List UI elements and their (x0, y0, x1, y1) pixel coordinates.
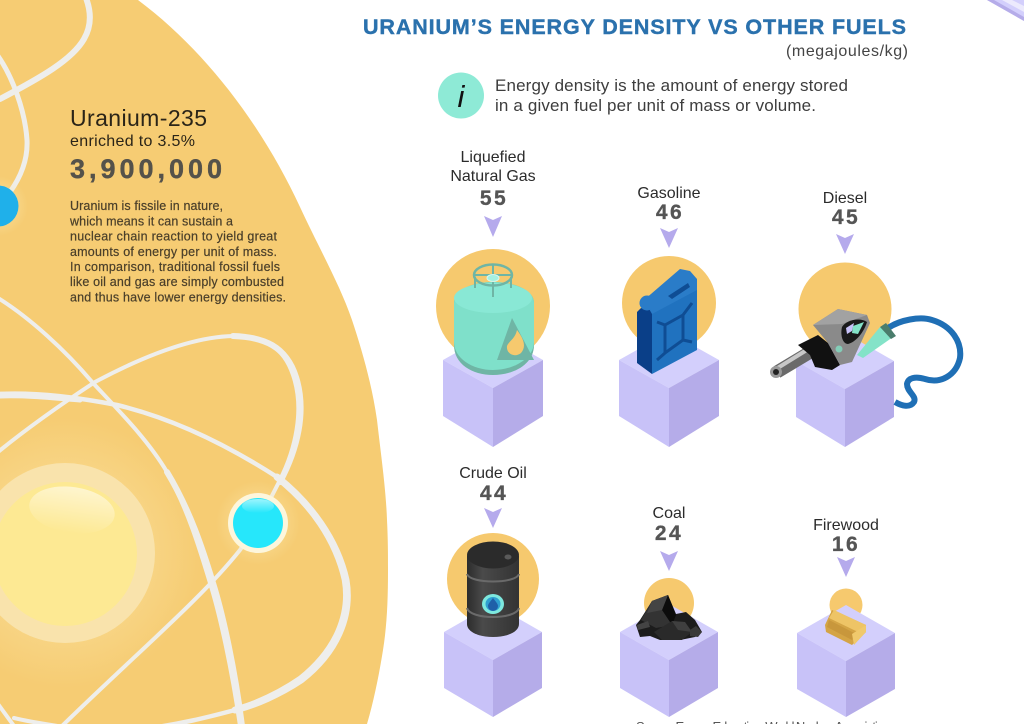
fuel: diesel (770, 190, 960, 447)
callout: energy density definition: Energy density is the amount of energy stored (495, 76, 848, 95)
panel: uranium atom background (0, 0, 388, 724)
fuel: gasoline: Gasoline (637, 185, 701, 202)
icon: gas cylinder (454, 264, 534, 375)
text block: uranium-235 (69, 105, 286, 304)
fuel: coal: 24 (655, 522, 683, 545)
text block: uranium-235: Uranium is fissile in nature, (70, 199, 223, 213)
text block: uranium-235: and thus have lower energy densities. (70, 290, 286, 304)
icon: jerry can (637, 269, 697, 374)
text block: uranium-235: like oil and gas are simply combusted (70, 275, 284, 289)
fuel: crude oil (444, 465, 542, 717)
fuel: crude oil: Crude Oil (459, 465, 527, 482)
text block: uranium-235: nuclear chain reaction to yield great (70, 230, 278, 244)
text block: uranium-235: amounts of energy per unit of mass. (70, 245, 277, 259)
icon: info: i (458, 79, 466, 114)
fuel: coal (620, 505, 718, 717)
text block: uranium-235: enriched to 3.5% (70, 133, 195, 150)
fuel: gasoline (619, 185, 719, 447)
callout: energy density definition (438, 72, 848, 118)
text block: uranium-235: Uranium-235 (70, 105, 207, 131)
icon: oil barrel (467, 542, 519, 637)
icon: firewood bundle (825, 610, 866, 645)
icon: coal pile (636, 595, 702, 640)
fuel: liquefied natural gas: Liquefied (461, 149, 525, 166)
fuel: gasoline: 46 (656, 201, 684, 224)
title: URANIUM’S ENERGY DENSITY VS OTHER FUELS (363, 15, 906, 39)
fuel: coal: Coal (653, 505, 685, 522)
fuel: liquefied natural gas: 55 (480, 187, 508, 210)
icon: nucleus (0, 418, 200, 688)
unit label: (megajoules/kg) (786, 43, 908, 60)
icon: electron right (216, 481, 300, 565)
icon: info (438, 72, 484, 118)
fuel: liquefied natural gas (436, 149, 550, 447)
fuel: diesel: Diesel (823, 190, 867, 207)
fuel: firewood (797, 517, 895, 717)
fuel: firewood: 16 (832, 533, 860, 556)
number: 3,900,000: 3,900,000 (70, 154, 222, 184)
callout: energy density definition: in a given fuel per unit of mass or volume. (495, 96, 816, 115)
text block: uranium-235: which means it can sustain a (69, 214, 233, 228)
fuel: liquefied natural gas: Natural Gas (450, 168, 536, 185)
fuel: crude oil: 44 (480, 482, 508, 505)
icon: fuel nozzle with hose (770, 309, 960, 406)
icon: electron left (0, 176, 28, 236)
fuel: diesel: 45 (832, 206, 860, 229)
decorative corner cube (987, 0, 1024, 21)
fuel: firewood: Firewood (813, 517, 879, 534)
text block: uranium-235: In comparison, traditional fossil fuels (70, 260, 280, 274)
